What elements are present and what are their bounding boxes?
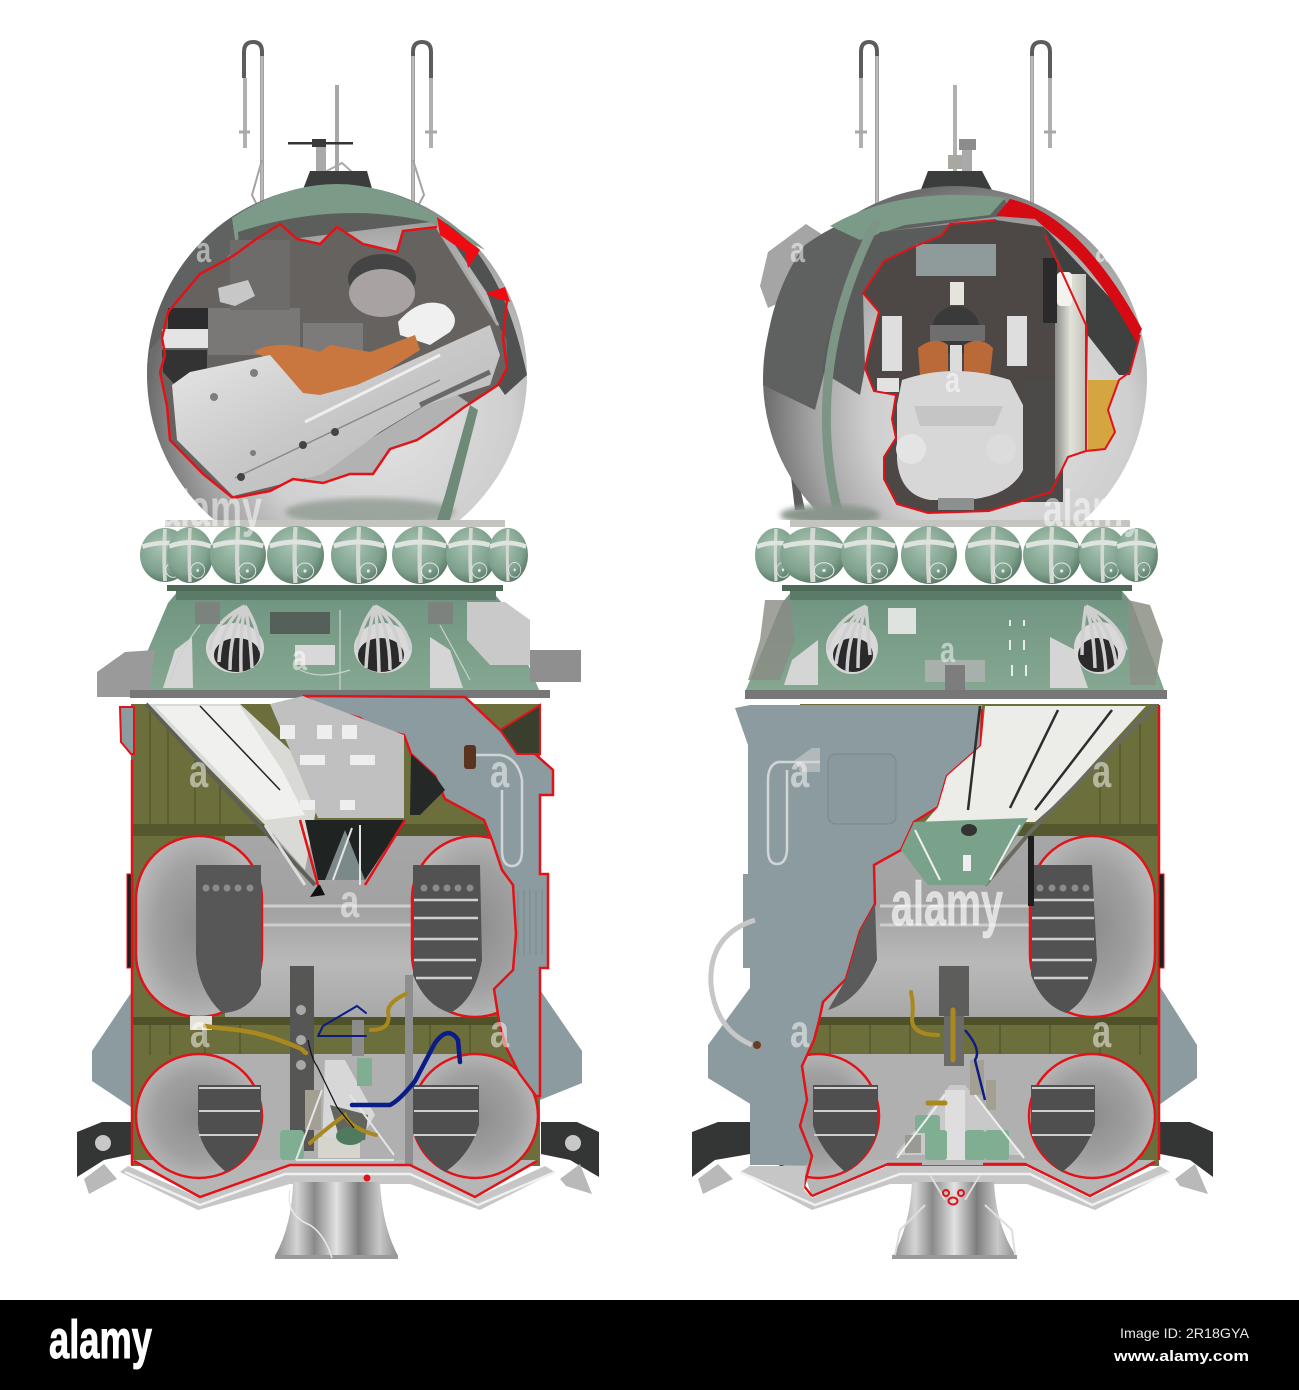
watermark letters: a bbox=[196, 229, 211, 270]
left main nozzle bbox=[275, 1174, 398, 1259]
watermark letters: a bbox=[1095, 229, 1110, 270]
right bottom shield bbox=[740, 1166, 1170, 1210]
right right-side tangle bbox=[1128, 600, 1163, 685]
left top-left flange bbox=[120, 707, 134, 754]
left cosmonaut helmet bbox=[398, 303, 455, 345]
left bottom red outline bbox=[134, 1161, 537, 1197]
right engine column bbox=[895, 966, 1024, 1160]
left ejection seat bbox=[172, 325, 500, 496]
left blue lines bbox=[318, 1006, 460, 1105]
watermark letters: a bbox=[1092, 1005, 1112, 1057]
watermark letters: a bbox=[1092, 745, 1112, 797]
right sphere cutaway interior bbox=[863, 199, 1142, 513]
right silver floor under tanks bbox=[800, 1160, 1155, 1197]
footer image id: Image ID: 2R18GYA bbox=[1120, 1325, 1250, 1341]
left hatch disc bbox=[348, 254, 416, 317]
left interior boxes bbox=[208, 308, 300, 355]
left red hull edge bbox=[131, 760, 133, 1165]
left wall edge bbox=[437, 227, 498, 325]
right red hull edge bbox=[1158, 705, 1160, 1160]
left service module bbox=[77, 696, 599, 1259]
left center hull gray bbox=[225, 836, 490, 1017]
left side equipment bbox=[467, 602, 530, 665]
left cone plumbing bbox=[170, 602, 470, 690]
left lower-right tank bbox=[412, 1054, 538, 1178]
right fins bbox=[708, 985, 1197, 1105]
watermark letters: a bbox=[292, 637, 307, 678]
right hull olive bbox=[800, 704, 1159, 1166]
footer logo: alamy bbox=[49, 1310, 152, 1370]
watermark letters: a bbox=[790, 1005, 810, 1057]
left cosmonaut body bbox=[254, 335, 420, 402]
left thin black line bbox=[308, 1040, 354, 1128]
right yellow hose bbox=[911, 992, 953, 1103]
right ejection seat front bbox=[877, 371, 1023, 510]
left equipment, far right bbox=[530, 650, 581, 682]
left cone fairings bbox=[163, 637, 463, 688]
watermark letters bbox=[189, 229, 1112, 1057]
left hull fittings bbox=[464, 745, 542, 955]
right blue line bbox=[965, 1030, 985, 1100]
footer bar bbox=[0, 1300, 1299, 1390]
right retro mounting plates bbox=[692, 1122, 1213, 1177]
right external hose bbox=[711, 920, 755, 1045]
watermark letters: a bbox=[790, 745, 810, 797]
right cut outline bbox=[800, 709, 982, 1196]
left red cut edge bbox=[437, 217, 510, 302]
left bottom shield bbox=[120, 1166, 555, 1210]
right cable bundles bbox=[826, 606, 1126, 674]
left center mast and crossbar bbox=[288, 85, 353, 175]
right bay dark bbox=[1028, 836, 1034, 906]
watermark letters: a bbox=[190, 1005, 210, 1057]
left engine cable bundles bbox=[206, 606, 412, 673]
right lower tank bbox=[1029, 1054, 1155, 1178]
right descent sphere bbox=[763, 186, 1147, 520]
right overhead box bbox=[916, 244, 996, 276]
left hull corner window bbox=[500, 705, 540, 754]
left nose cap bbox=[302, 171, 373, 192]
left central bay bbox=[265, 696, 445, 897]
watermark letters: a bbox=[790, 229, 805, 270]
right side black strip bbox=[1159, 874, 1164, 968]
right insulation block bbox=[1088, 380, 1119, 451]
watermark letters: a bbox=[189, 745, 209, 797]
right bottom red outline bbox=[812, 1162, 1155, 1196]
right green bulkhead bbox=[901, 818, 1028, 885]
right hull fittings bbox=[711, 748, 896, 1049]
right ring of tanks bbox=[755, 520, 1158, 584]
right interior panel bbox=[1055, 274, 1086, 480]
left upper-left tank bbox=[136, 836, 262, 1017]
left lower cylinder bbox=[300, 390, 470, 483]
right seat side rails bbox=[882, 316, 1027, 371]
left hull olive bbox=[131, 704, 540, 1166]
left side black strip bbox=[127, 874, 133, 968]
left yellow hoses bbox=[205, 994, 406, 1143]
watermark letters: a bbox=[945, 359, 960, 400]
right upper tank bbox=[1030, 836, 1155, 1017]
right outer hull cover bbox=[735, 705, 982, 1165]
watermark: center alamy: alamy bbox=[891, 870, 1003, 939]
right cone fairings bbox=[784, 637, 1088, 688]
right lower-left tank bbox=[757, 1054, 879, 1178]
watermark: sphere right: alamy bbox=[1043, 480, 1143, 538]
right cosmonaut knees bbox=[918, 341, 993, 376]
right main nozzle bbox=[892, 1175, 1017, 1259]
watermark letters: a bbox=[940, 629, 955, 670]
right cutaway outline bbox=[863, 220, 1140, 513]
left retro mounting plates bbox=[77, 1122, 599, 1177]
right side hatch bbox=[760, 224, 826, 308]
right nose cap bbox=[920, 171, 993, 192]
left descent sphere bbox=[147, 184, 527, 520]
left small thrusters bbox=[84, 1164, 592, 1194]
right bottom pipe bbox=[740, 1172, 1170, 1205]
right service module bbox=[692, 704, 1213, 1259]
left bottom pipe bbox=[125, 1172, 555, 1205]
watermark letters: a bbox=[490, 745, 510, 797]
left sphere cutaway interior bbox=[160, 217, 510, 498]
left antennas bbox=[239, 42, 437, 215]
right antennas bbox=[855, 42, 1056, 210]
right instrument cone bbox=[745, 585, 1167, 699]
left cutaway red outline bbox=[160, 224, 507, 498]
left instrument cone bbox=[97, 585, 581, 698]
footer url: www.alamy.com bbox=[1113, 1348, 1249, 1365]
left engine structure bbox=[280, 966, 413, 1165]
left equipment, far left bbox=[97, 650, 155, 697]
watermark letters: a bbox=[490, 1005, 510, 1057]
right red cut edge bbox=[996, 199, 1142, 342]
left ring of spherical tanks bbox=[140, 520, 528, 584]
left silver floor under tanks bbox=[132, 1160, 537, 1197]
left fins bbox=[92, 987, 582, 1107]
right strut bbox=[772, 320, 805, 510]
right red rings bbox=[943, 1190, 964, 1204]
right mast bbox=[948, 85, 976, 190]
left lower-left tank bbox=[136, 1054, 262, 1178]
left folded panel bbox=[146, 704, 316, 885]
right folded panel bbox=[925, 705, 1156, 885]
watermark letters: a bbox=[340, 875, 360, 927]
left upper-right tank bbox=[412, 836, 538, 1017]
right cone plumbing bbox=[888, 608, 1026, 695]
left tank drain fitting bbox=[190, 1016, 212, 1030]
right center hull gray bbox=[820, 836, 1100, 1017]
left outer hull cover bbox=[303, 696, 553, 1096]
right left-side tangle bbox=[748, 600, 795, 680]
right dark tank sliver bbox=[828, 904, 877, 1010]
watermark: sphere left: alamy bbox=[160, 480, 262, 538]
right small thrusters bbox=[698, 1164, 1208, 1194]
